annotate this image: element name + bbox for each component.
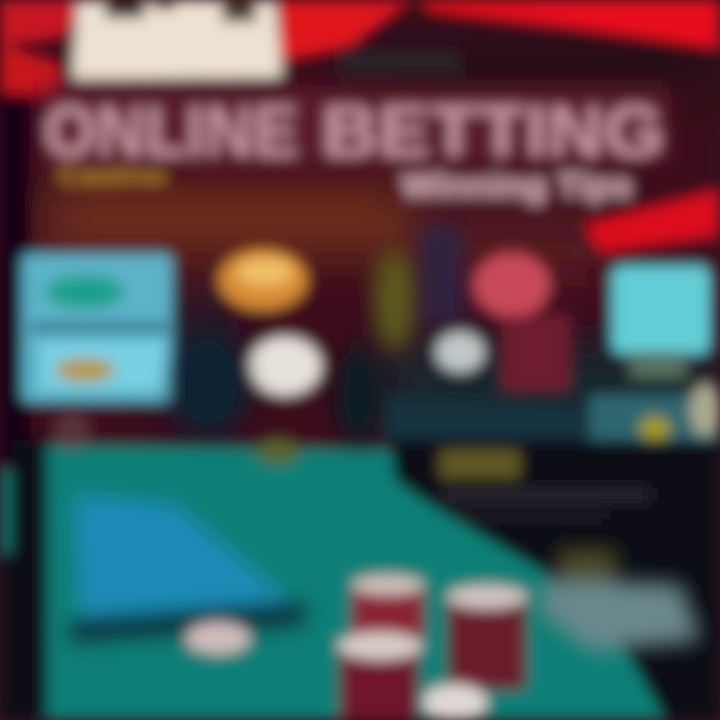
poker chip stacks (338, 575, 527, 720)
poker chip small (186, 622, 250, 654)
small white screen (436, 332, 484, 372)
right cyan screen (590, 266, 720, 440)
title (44, 92, 664, 172)
teal left sliver (0, 470, 16, 555)
small pink marker (54, 412, 90, 448)
orange lamp (219, 250, 307, 310)
yellow tag: Casino (58, 160, 166, 190)
title: BETTING (322, 92, 664, 172)
left cyan screen (22, 254, 172, 402)
top left red banner (0, 0, 720, 98)
teal casino table (30, 445, 665, 720)
top white emblem (72, 0, 282, 80)
dark figures (172, 335, 382, 445)
subtitle: Winning Tips (402, 167, 632, 205)
dark right panel (385, 395, 720, 720)
white screen (249, 337, 321, 395)
back wall glow (40, 40, 720, 430)
right red stripe (585, 190, 720, 252)
red glow (474, 253, 550, 317)
panel text (440, 450, 650, 520)
yellow chip under screen (256, 440, 300, 464)
grey stat card (540, 550, 700, 650)
blue betting panel (70, 495, 305, 642)
maroon machine (502, 315, 570, 390)
left dark pillar (0, 95, 46, 720)
title: ONLINE (44, 92, 298, 172)
title backing (40, 88, 670, 164)
central purple column (420, 225, 464, 325)
green light (375, 250, 415, 350)
